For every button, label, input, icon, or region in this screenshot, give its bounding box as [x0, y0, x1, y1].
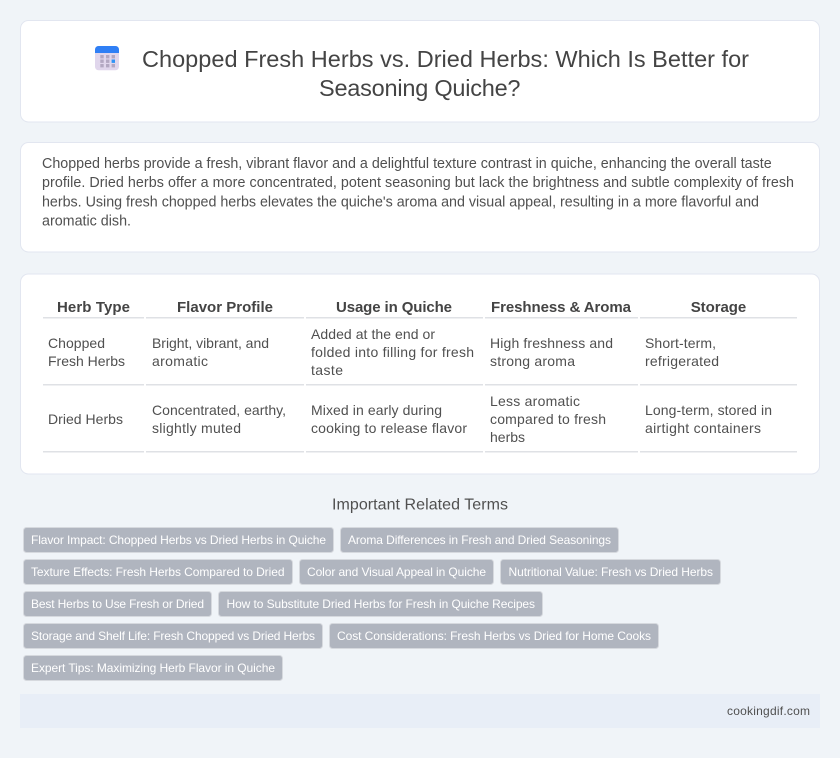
tag: best herbs — [24, 592, 212, 616]
tag: how to substitute: How to Substitute Dried Herbs for Fresh in Quiche Recipes — [226, 597, 535, 611]
table header row: Herb Type — [57, 299, 130, 316]
summary text — [42, 156, 794, 230]
tag: color and visual appeal — [300, 560, 494, 584]
summary text: herbs. Using fresh chopped herbs elevates the quiche's aroma and visual appeal, resulting in a more flavorful and — [42, 194, 759, 210]
summary text: Chopped herbs provide a fresh, vibrant flavor and a delightful texture contrast in quiche, enhancing the overall taste — [42, 156, 772, 172]
title — [142, 46, 749, 101]
table header row — [57, 299, 746, 316]
summary text: aromatic dish. — [42, 214, 131, 230]
table row: dried herbs: Mixed in early during — [311, 402, 442, 418]
tag: flavor impact — [24, 528, 334, 552]
table row: chopped fresh herbs: High freshness and — [490, 335, 613, 351]
tag: aroma differences — [340, 528, 618, 552]
table header row: Storage — [691, 299, 746, 316]
table header row: Flavor Profile — [177, 299, 273, 316]
tag: best herbs: Best Herbs to Use Fresh or Dried — [31, 597, 204, 611]
table row: dried herbs: slightly muted — [152, 420, 241, 436]
table row: chopped fresh herbs: aromatic — [152, 353, 208, 369]
footer source: cookingdif.com — [727, 704, 810, 718]
table row: chopped fresh herbs: taste — [311, 362, 343, 378]
tag: expert tips: Expert Tips: Maximizing Herb Flavor in Quiche — [31, 661, 275, 675]
summary text: profile. Dried herbs offer a more concentrated, potent seasoning but lack the brightness and subtle complexity of fresh — [42, 175, 794, 191]
table row: chopped fresh herbs — [48, 326, 719, 378]
tag: color and visual appeal: Color and Visual Appeal in Quiche — [307, 565, 486, 579]
table row: dried herbs: compared to fresh — [490, 411, 606, 427]
table row: chopped fresh herbs: refrigerated — [645, 353, 719, 369]
table row: chopped fresh herbs: Added at the end or — [311, 326, 435, 342]
table row: dried herbs: Dried Herbs — [48, 411, 123, 427]
table row: dried herbs: Long-term, stored in — [645, 402, 772, 418]
footer — [20, 694, 820, 728]
table row: dried herbs — [48, 393, 772, 445]
tag: storage and shelf life: Storage and Shelf Life: Fresh Chopped vs Dried Herbs — [31, 629, 315, 643]
table row: chopped fresh herbs: Chopped — [48, 335, 105, 351]
tag: texture effects — [24, 560, 292, 584]
tag: expert tips — [24, 656, 282, 680]
table header row: Freshness & Aroma — [491, 299, 632, 316]
title: Chopped Fresh Herbs vs. Dried Herbs: Which Is Better for — [142, 46, 749, 72]
table row: dried herbs: herbs — [490, 429, 525, 445]
panel: header — [20, 20, 820, 122]
tag: cost considerations: Cost Considerations: Fresh Herbs vs Dried for Home Cooks — [337, 629, 651, 643]
table header row: Usage in Quiche — [336, 299, 452, 316]
tag: flavor impact: Flavor Impact: Chopped Herbs vs Dried Herbs in Quiche — [31, 533, 326, 547]
table row: dried herbs: airtight containers — [645, 420, 761, 436]
tag: nutritional value — [500, 560, 720, 584]
table row: chopped fresh herbs: Short-term, — [645, 335, 716, 351]
tag: aroma differences: Aroma Differences in Fresh and Dried Seasonings — [348, 533, 611, 547]
table row: dried herbs: Concentrated, earthy, — [152, 402, 286, 418]
icon: calendar — [95, 46, 119, 70]
tag: cost considerations — [330, 624, 658, 648]
table row: chopped fresh herbs: Fresh Herbs — [48, 353, 125, 369]
title: Seasoning Quiche? — [319, 75, 520, 101]
tag: storage and shelf life — [24, 624, 322, 648]
tag: how to substitute — [218, 592, 542, 616]
panel: comparison table — [20, 274, 820, 474]
heading: important related terms: Important Related Terms — [332, 496, 508, 514]
tag: texture effects: Texture Effects: Fresh Herbs Compared to Dried — [31, 565, 284, 579]
tag: nutritional value: Nutritional Value: Fresh vs Dried Herbs — [508, 565, 713, 579]
table row: chopped fresh herbs: strong aroma — [490, 353, 575, 369]
table row: chopped fresh herbs: Bright, vibrant, and — [152, 335, 269, 351]
table row: chopped fresh herbs: folded into filling for fresh — [311, 344, 474, 360]
panel: summary — [20, 142, 820, 252]
related term tags — [24, 528, 720, 680]
table row: dried herbs: cooking to release flavor — [311, 420, 467, 436]
table row: dried herbs: Less aromatic — [490, 393, 580, 409]
